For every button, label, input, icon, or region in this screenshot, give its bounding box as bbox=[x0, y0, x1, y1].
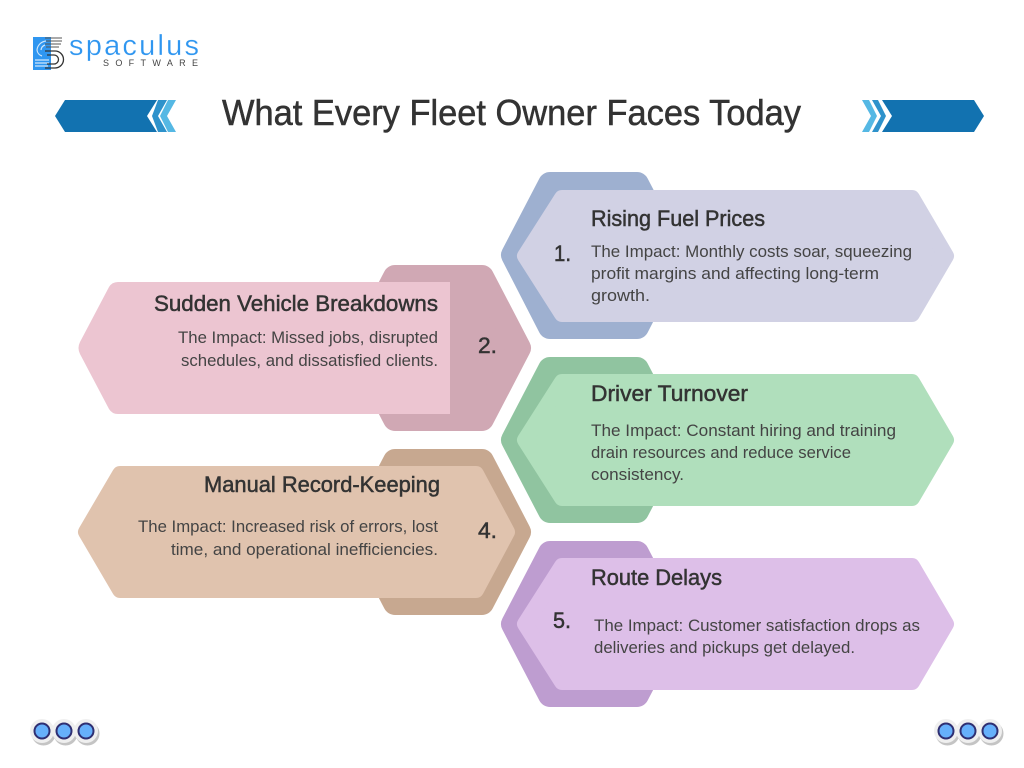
panel 5 body: deliveries and pickups get delayed. bbox=[594, 638, 855, 657]
decorative dots: bottom left bbox=[30, 719, 100, 746]
panel 2 front shape bbox=[78, 282, 450, 414]
panel 1 back shape bbox=[513, 184, 674, 327]
panel 4 number: 4. bbox=[478, 518, 497, 543]
panel 4 front shape bbox=[86, 474, 507, 590]
panel 5 front shape bbox=[525, 566, 946, 682]
panel 1 body: profit margins and affecting long-term bbox=[591, 264, 879, 283]
header banner: left arrow bbox=[55, 100, 176, 132]
panel 2 heading: Sudden Vehicle Breakdowns bbox=[154, 291, 438, 316]
panel 5 back shape bbox=[513, 553, 674, 695]
panel 3 heading: Driver Turnover bbox=[591, 381, 748, 406]
panel 4 back shape bbox=[358, 461, 519, 603]
panel 3: driver turnover bbox=[513, 369, 946, 511]
panel 2 body: The Impact: Missed jobs, disrupted bbox=[178, 328, 438, 347]
title: What Every Fleet Owner Faces Today bbox=[222, 92, 801, 133]
panel 4 body: The Impact: Increased risk of errors, lost bbox=[138, 517, 438, 536]
panel 4 heading: Manual Record-Keeping bbox=[204, 472, 440, 497]
panel 2 body: schedules, and dissatisfied clients. bbox=[181, 351, 438, 370]
panel 1: rising fuel prices bbox=[513, 184, 946, 327]
panel 4 body: time, and operational inefficiencies. bbox=[171, 540, 438, 559]
panel 1 heading: Rising Fuel Prices bbox=[591, 206, 765, 231]
panel 1 body: growth. bbox=[591, 286, 650, 305]
header banner: right arrow bbox=[862, 100, 984, 132]
panel 5 number: 5. bbox=[553, 608, 571, 633]
panel 5: route delays bbox=[513, 553, 946, 695]
logo: spaculus software bbox=[33, 30, 199, 70]
logo wordmark: spaculus bbox=[69, 30, 199, 62]
panel 3 front shape bbox=[525, 382, 946, 498]
panel 1 front shape bbox=[525, 198, 946, 314]
panel 3 body: The Impact: Constant hiring and training bbox=[591, 421, 896, 440]
panel 3 back shape bbox=[513, 369, 674, 511]
decorative dots: bottom right bbox=[934, 719, 1004, 746]
panel 3 body: consistency. bbox=[591, 465, 684, 484]
panel 2 back shape bbox=[358, 277, 519, 419]
icon: logo mark bbox=[33, 37, 64, 70]
panel 1 body: The Impact: Monthly costs soar, squeezing bbox=[591, 242, 912, 261]
logo tagline: SOFTWARE bbox=[103, 58, 198, 68]
panel 2: sudden vehicle breakdowns bbox=[78, 277, 519, 419]
panel 3 body: drain resources and reduce service bbox=[591, 443, 851, 462]
panel 2 number: 2. bbox=[478, 333, 497, 358]
panel 1 number: 1. bbox=[554, 241, 571, 266]
panel 5 heading: Route Delays bbox=[591, 565, 722, 590]
panel 5 body: The Impact: Customer satisfaction drops as bbox=[594, 616, 920, 635]
panel 4: manual record-keeping bbox=[86, 461, 519, 603]
